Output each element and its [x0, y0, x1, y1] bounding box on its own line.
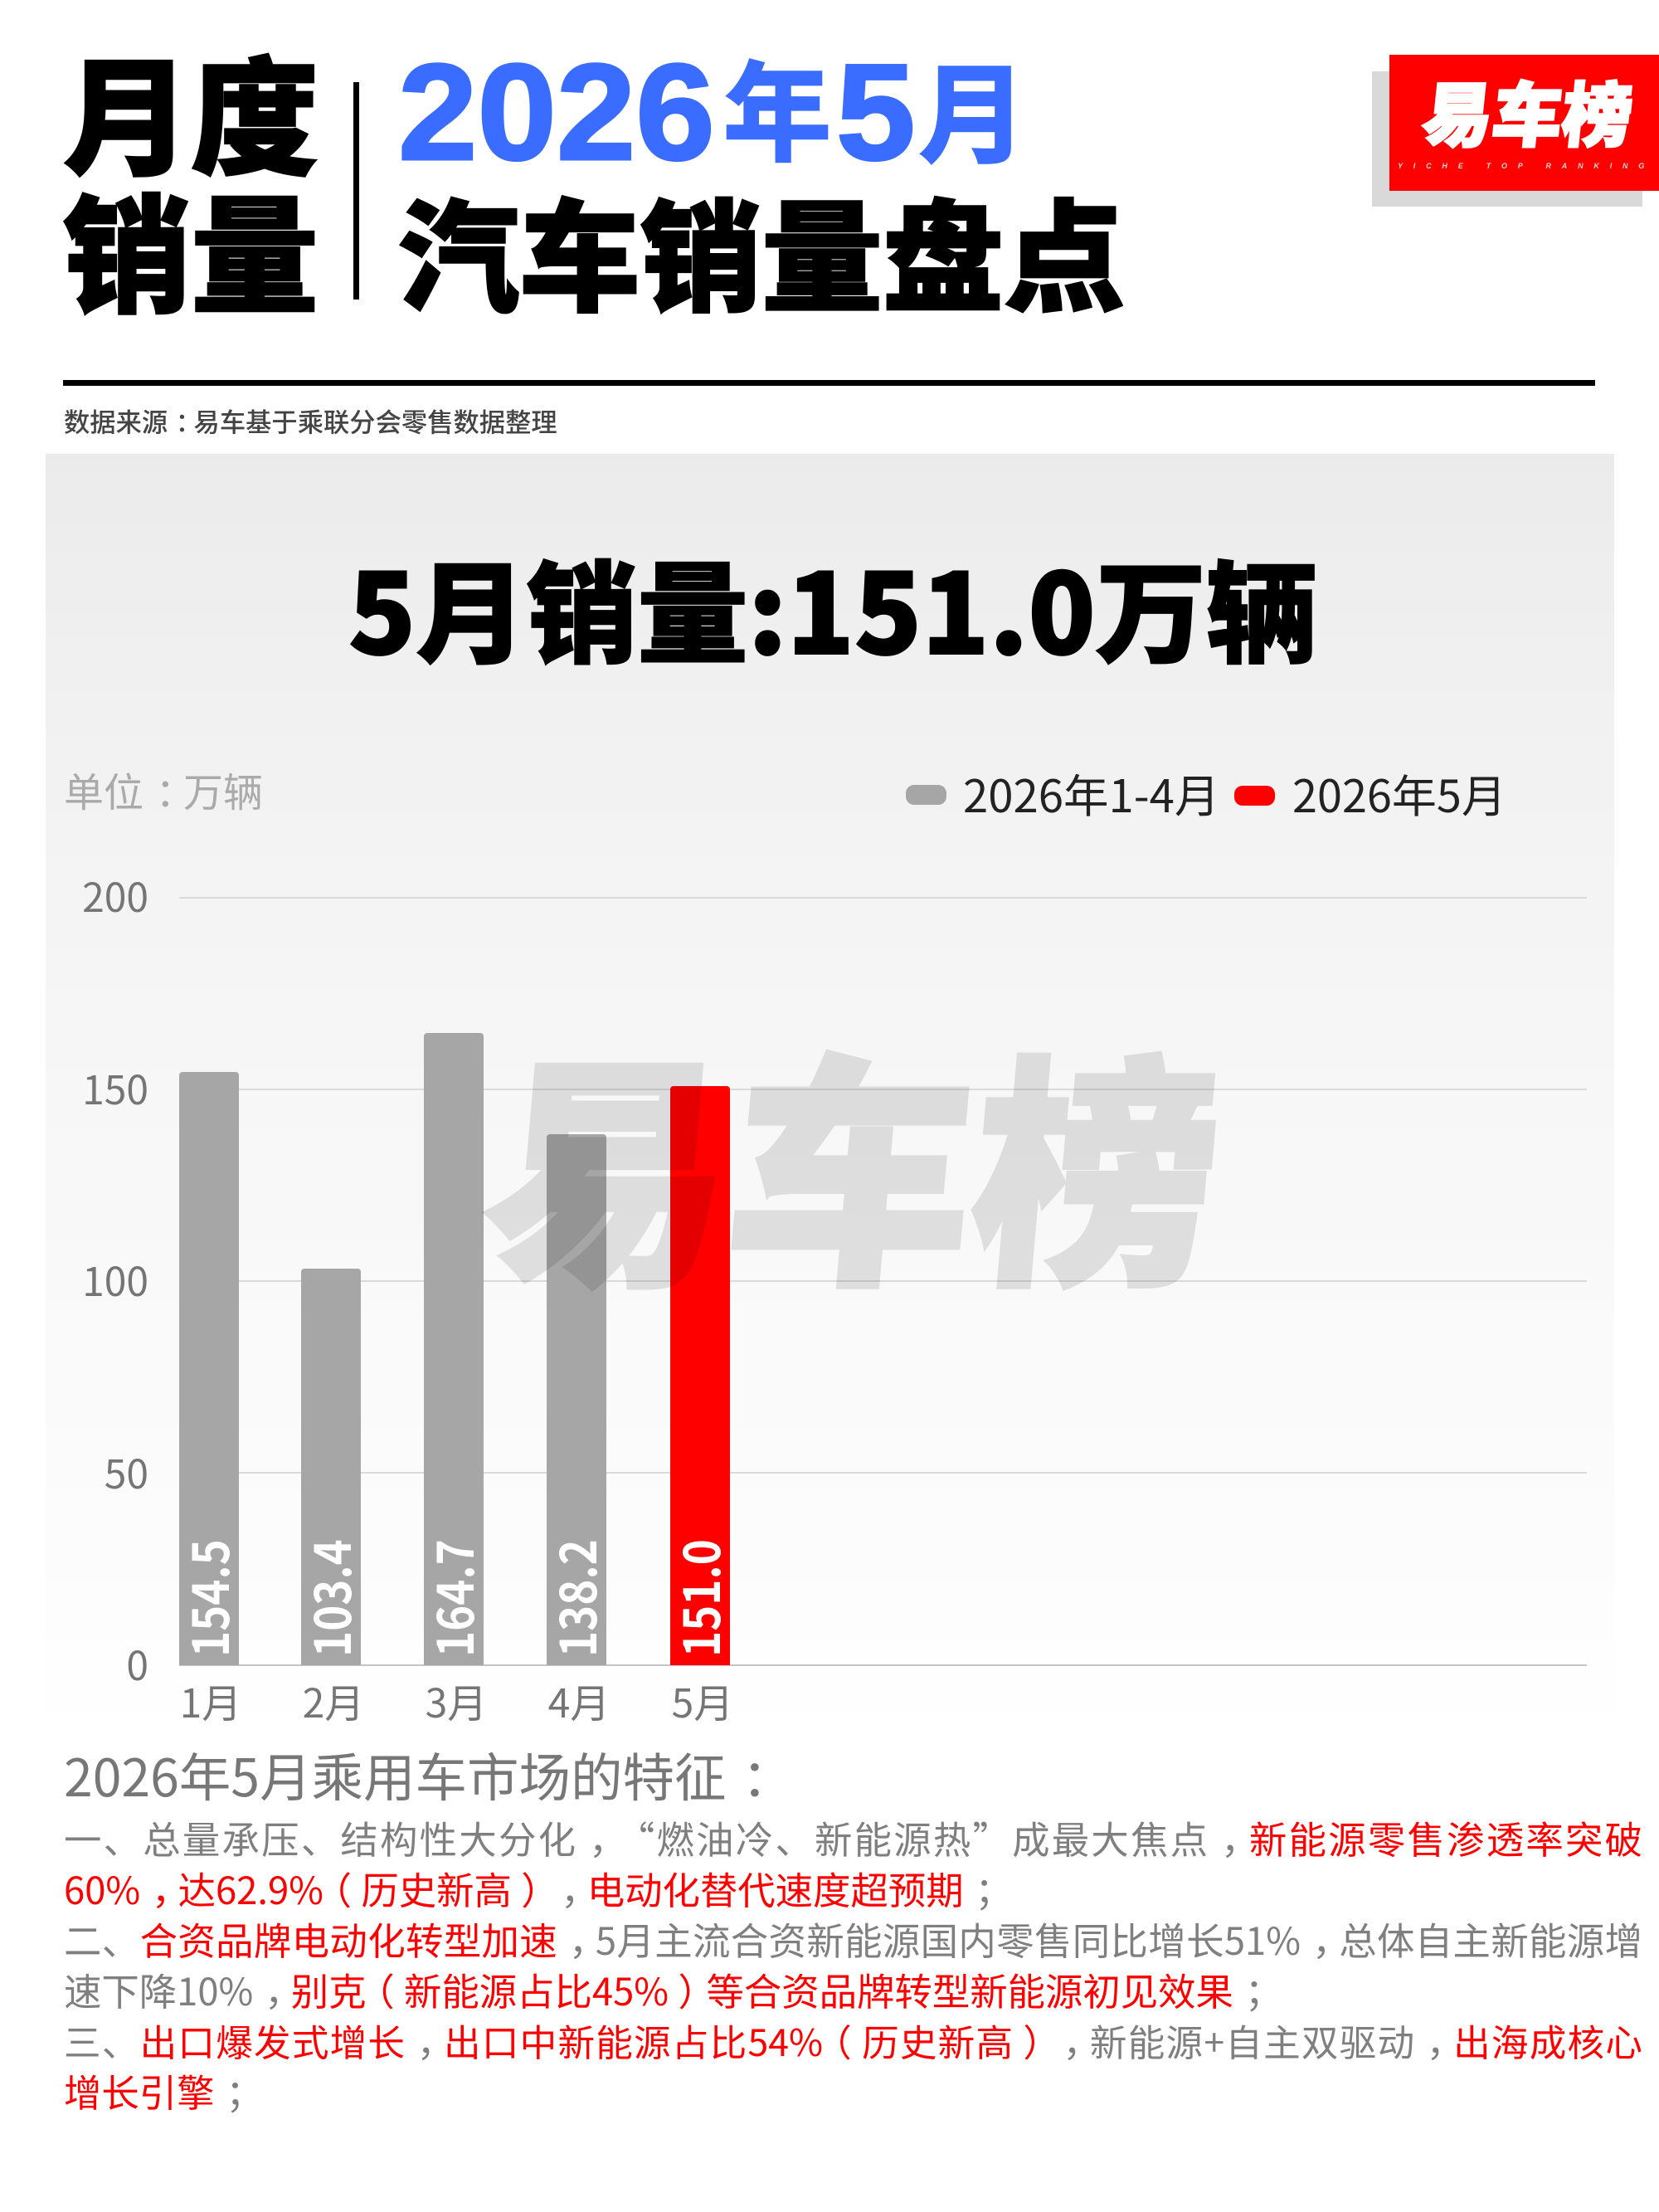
logo wordmark: 易车榜 [1418, 61, 1637, 161]
bar chart [82, 865, 1587, 1729]
logo: 易车榜 [1372, 55, 1659, 207]
unit label: 单位 ：万辆 [64, 760, 263, 818]
bar: May 151.0 [670, 1086, 730, 1665]
bar: March 164.7 [424, 1033, 484, 1665]
title: monthly sales label: 销量 [63, 154, 319, 339]
y axis labels: 150 [82, 1058, 148, 1116]
divider [353, 82, 359, 300]
title: 2026年5月: 月 [919, 29, 1027, 185]
title: monthly sales label: 月度 [63, 17, 319, 202]
month label: 3月: 3月 [426, 1671, 487, 1729]
line 5: 三、出口爆发式增长 ，出口中新能源占比54%（历史新高），新能源+自主双驱动 ，出海成核心 [64, 2013, 1642, 2067]
value: 138.2: 138.2 [539, 1539, 611, 1657]
legend label: Jan-Apr: 2026年1-4月 [963, 760, 1219, 826]
title: 2026年5月 [398, 27, 1027, 188]
y axis labels: 0 [126, 1634, 148, 1692]
value: 151.0: 151.0 [663, 1539, 735, 1657]
value: 103.4: 103.4 [294, 1539, 366, 1657]
text block: market features [64, 1810, 1642, 2118]
y axis labels: 100 [82, 1250, 148, 1308]
main heading: 5月销量:151.0万辆 [348, 526, 1317, 686]
bar: April 138.2 [547, 1134, 606, 1665]
value: 154.5: 154.5 [172, 1539, 244, 1657]
data source note: 数据来源 ：易车基于乘联分会零售数据整理 [64, 402, 557, 440]
title: 2026年5月: 年 [723, 27, 831, 183]
line 4: 速下降10% ，别克（新能源占比45%）等合资品牌转型新能源初见效果 ； [64, 1962, 1282, 2017]
logo tagline: YICHE TOP RANKING [1398, 162, 1655, 170]
logo panel [1389, 55, 1659, 191]
line 1: 一、总量承压、结构性大分化 ，“燃油冷、新能源热”成最大焦点 ，新能源零售渗透率突破 [64, 1810, 1642, 1865]
logo shadow [1372, 71, 1642, 207]
line 3: 二、合资品牌电动化转型加速 ，5月主流合资新能源国内零售同比增长51% ，总体自主新能源增 [64, 1912, 1642, 1966]
title: 2026年5月: 5 [836, 36, 915, 188]
text heading: market features: 2026年5月乘用车市场的特征 ： [64, 1736, 794, 1811]
month label: 1月: 1月 [180, 1671, 241, 1729]
month label: 2月: 2月 [303, 1671, 364, 1729]
panel: sales chart background [46, 454, 1614, 1740]
line 2: 60% ，达62.9%（历史新高），电动化替代速度超预期 ； [64, 1861, 1013, 1916]
header rule [63, 380, 1595, 386]
legend swatch: Jan-Apr [906, 785, 946, 805]
y axis labels: 200 [82, 865, 148, 923]
title: 汽车销量盘点: 汽车销量盘点 [398, 162, 1125, 337]
y axis labels [82, 865, 148, 1692]
bar: January 154.5 [179, 1072, 239, 1665]
watermark: 易车榜 [472, 981, 1235, 1334]
month label: 5月: 5月 [672, 1671, 733, 1729]
value: 164.7: 164.7 [416, 1539, 489, 1657]
legend [906, 760, 1506, 826]
legend swatch: May [1234, 786, 1275, 806]
bar: February 103.4 [301, 1269, 361, 1665]
y axis labels: 50 [105, 1442, 148, 1500]
line 6: 增长引擎 ； [64, 2063, 264, 2118]
title: 2026年5月: 2026 [398, 36, 715, 188]
month label: 4月: 4月 [548, 1671, 610, 1729]
legend label: May: 2026年5月 [1292, 760, 1506, 826]
title: monthly sales label [63, 17, 319, 339]
